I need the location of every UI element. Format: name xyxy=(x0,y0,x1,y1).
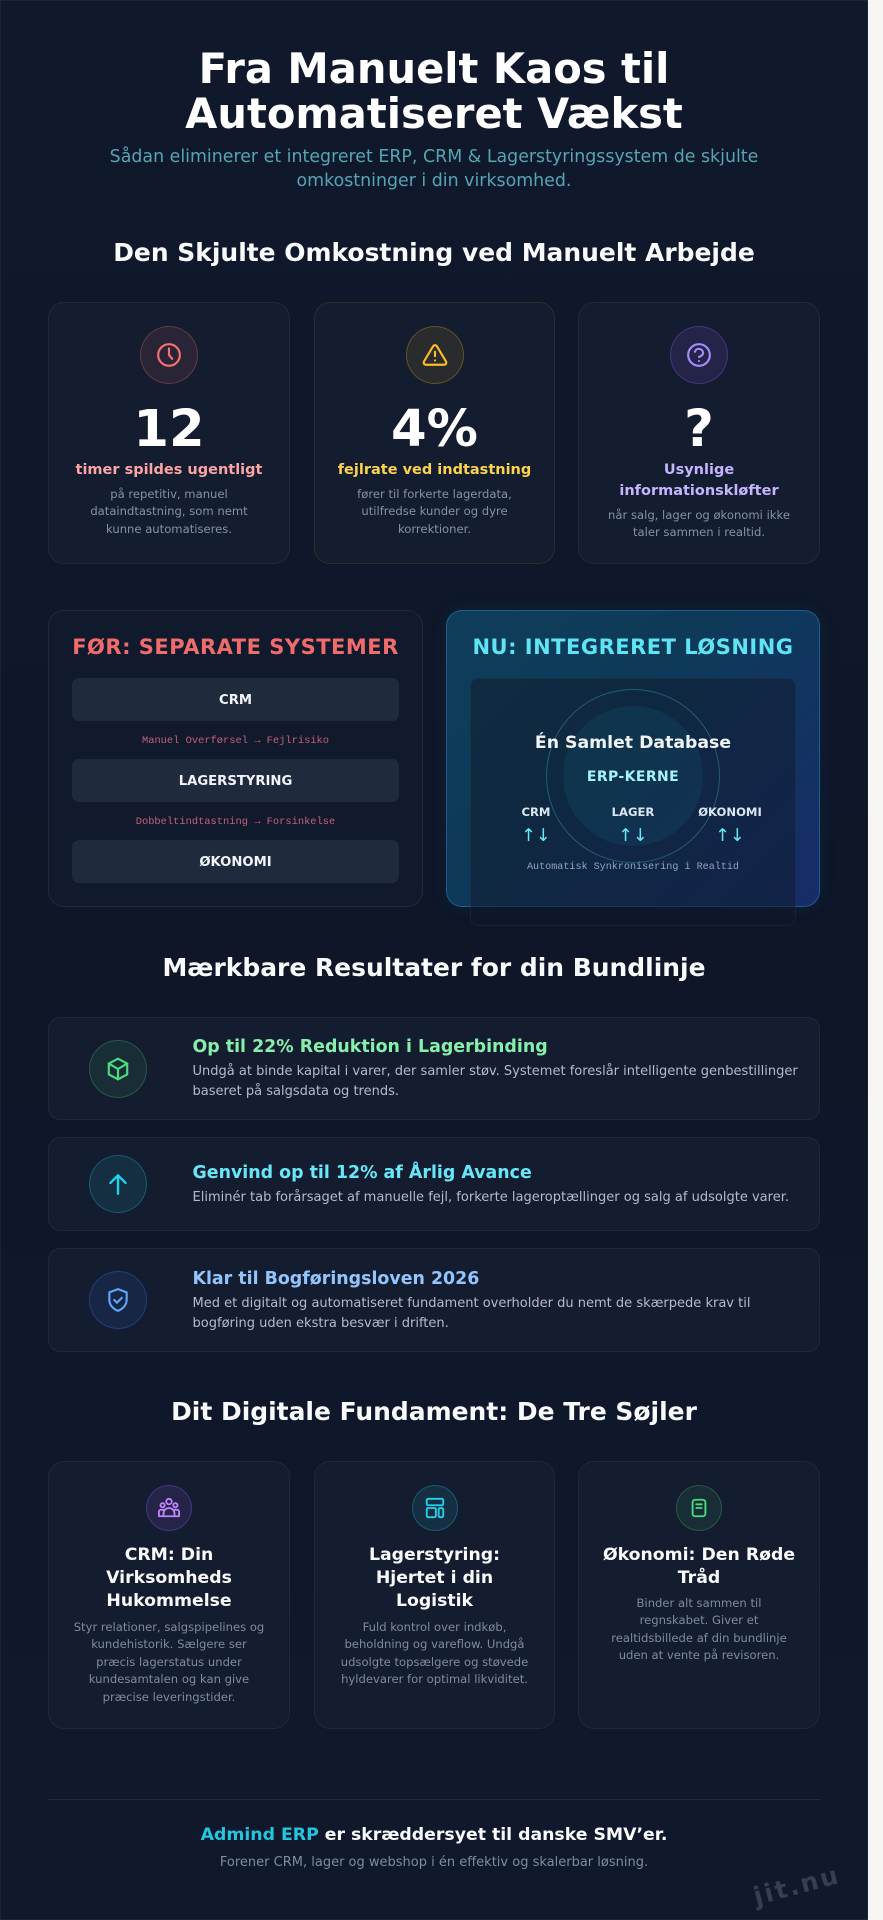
subtitle xyxy=(110,146,758,191)
connector: manual transfer: Manuel Overførsel → Fejlrisiko xyxy=(142,735,329,747)
arrows: inventory sync: ↑↓ xyxy=(618,826,648,846)
database title: Én Samlet Database xyxy=(535,733,731,753)
icon: arrow up xyxy=(89,1155,147,1213)
diagram: ERP core rings xyxy=(546,689,720,863)
footer headline: Admind ERP er skræddersyet til danske SMV’er. xyxy=(201,1825,667,1845)
stat label: informationskløfter xyxy=(619,482,779,498)
stat description: taler sammen i realtid. xyxy=(633,525,765,539)
connector: double entry: Dobbeltindtastning → Forsinkelse xyxy=(136,816,335,828)
stat number: ? xyxy=(684,399,714,459)
result description xyxy=(192,1063,798,1099)
pillar title: Tråd xyxy=(678,1568,720,1588)
icon: question mark xyxy=(670,326,728,384)
result description: bogføring uden ekstra besvær i driften. xyxy=(192,1316,449,1331)
icon: ledger xyxy=(676,1485,722,1531)
ERP core label: ERP-KERNE xyxy=(587,769,679,785)
stat label: timer spildes ugentligt xyxy=(76,462,262,478)
panel: stat card 4 percent xyxy=(314,302,555,564)
heading: pillars: Dit Digitale Fundament: De Tre Søjler xyxy=(171,1397,697,1426)
panel: unified database xyxy=(470,678,796,926)
heading: now: NU: INTEGRERET LØSNING xyxy=(472,635,794,659)
stat label xyxy=(619,462,779,498)
stat number: 4% xyxy=(391,399,478,459)
result description: baseret på salgsdata og trends. xyxy=(192,1084,399,1099)
system box: inventory xyxy=(72,759,399,802)
stat label: fejlrate ved indtastning xyxy=(338,462,531,478)
footer divider xyxy=(48,1799,820,1800)
panel: pillar inventory xyxy=(314,1461,555,1729)
pillar description: hyldevarer for optimal likviditet. xyxy=(341,1672,528,1686)
icon: shield check xyxy=(89,1271,147,1329)
panel: pillar CRM xyxy=(48,1461,290,1729)
panel: result compliance xyxy=(48,1248,820,1352)
pillar description: uden at vente på revisoren. xyxy=(619,1648,779,1662)
system box: inventory: LAGERSTYRING xyxy=(179,774,292,789)
stat description: på repetitiv, manuel xyxy=(110,487,228,501)
pillar description: beholdning og vareflow. Undgå xyxy=(344,1637,525,1651)
title xyxy=(185,44,683,138)
panel: before, separate systems xyxy=(48,610,423,907)
stat description xyxy=(90,487,248,536)
stat description: når salg, lager og økonomi ikke xyxy=(608,508,790,522)
result title: Klar til Bogføringsloven 2026 xyxy=(192,1269,479,1289)
result description: Eliminér tab forårsaget af manuelle fejl, forkerte lageroptællinger og salg af udsolgte varer. xyxy=(192,1190,789,1205)
stat label: Usynlige xyxy=(664,462,734,478)
pillar title: Lagerstyring: xyxy=(369,1545,500,1565)
icon: box xyxy=(89,1040,147,1098)
system box: CRM: CRM xyxy=(219,693,252,708)
system box: CRM xyxy=(72,678,399,721)
pillar title: Hjertet i din xyxy=(376,1568,493,1588)
heading: hidden cost: Den Skjulte Omkostning ved Manuelt Arbejde xyxy=(113,238,755,267)
result description xyxy=(192,1296,750,1331)
panel: stat card 12 hours xyxy=(48,302,290,564)
pillar title xyxy=(106,1545,232,1611)
watermark: jit.nu xyxy=(750,1860,843,1911)
pillar description: regnskabet. Giver et xyxy=(640,1613,758,1627)
stat description: korrektioner. xyxy=(398,522,471,536)
heading: results: Mærkbare Resultater for din Bundlinje xyxy=(162,953,706,982)
module label: finance: ØKONOMI xyxy=(698,805,762,819)
stat description: fører til forkerte lagerdata, xyxy=(357,487,512,501)
pillar title xyxy=(369,1545,500,1611)
icon: people xyxy=(146,1485,192,1531)
module label: CRM: CRM xyxy=(522,805,550,819)
stat description xyxy=(608,508,790,539)
pillar title: Logistik xyxy=(396,1591,473,1611)
module label: inventory: LAGER xyxy=(612,805,654,819)
pillar title xyxy=(603,1545,795,1588)
pillar description: præcise leveringstider. xyxy=(103,1690,235,1704)
heading: before: FØR: SEPARATE SYSTEMER xyxy=(72,635,399,659)
sync caption: Automatisk Synkronisering i Realtid xyxy=(527,862,739,873)
system box: finance: ØKONOMI xyxy=(199,855,272,870)
stat description: kunne automatiseres. xyxy=(106,522,232,536)
pillar description xyxy=(74,1620,264,1704)
icon: warning triangle xyxy=(406,326,464,384)
icon: clock xyxy=(140,326,198,384)
pillar description: Styr relationer, salgspipelines og xyxy=(74,1620,264,1634)
title: Fra Manuelt Kaos til xyxy=(199,44,669,93)
icon: layout xyxy=(412,1485,458,1531)
result title: Op til 22% Reduktion i Lagerbinding xyxy=(192,1037,548,1057)
result title: Genvind op til 12% af Årlig Avance xyxy=(192,1163,532,1183)
stat description: utilfredse kunder og dyre xyxy=(361,504,508,518)
footer note: Forener CRM, lager og webshop i én effektiv og skalerbar løsning. xyxy=(220,1855,648,1870)
pillar description: realtidsbillede af din bundlinje xyxy=(611,1631,787,1645)
pillar description: Binder alt sammen til xyxy=(637,1596,761,1610)
diagram: ERP core disc xyxy=(563,706,703,846)
result description: Med et digitalt og automatiseret fundament overholder du nemt de skærpede krav til xyxy=(192,1296,750,1311)
pillar title: Hukommelse xyxy=(106,1591,232,1611)
panel: pillar finance xyxy=(578,1461,820,1729)
pillar description: Fuld kontrol over indkøb, xyxy=(363,1620,506,1634)
pillar title: CRM: Din xyxy=(125,1545,213,1565)
pillar description xyxy=(341,1620,528,1686)
pillar title: Virksomheds xyxy=(106,1568,232,1588)
pillar description: kundesamtalen og kan give xyxy=(89,1672,249,1686)
subtitle: Sådan eliminerer et integreret ERP, CRM & Lagerstyringssystem de skjulte xyxy=(110,147,758,167)
pillar description: kundehistorik. Sælgere ser xyxy=(91,1637,247,1651)
panel: result inventory xyxy=(48,1017,820,1120)
title: Automatiseret Vækst xyxy=(185,89,683,138)
panel: now, integrated solution xyxy=(446,610,820,907)
arrows: finance sync: ↑↓ xyxy=(715,826,745,846)
panel: result margin xyxy=(48,1137,820,1231)
pillar description: præcis lagerstatus under xyxy=(96,1655,242,1669)
subtitle: omkostninger i din virksomhed. xyxy=(297,171,571,191)
result description: Undgå at binde kapital i varer, der samler støv. Systemet foreslår intelligente genbestillinger xyxy=(192,1064,798,1079)
pillar description: udsolgte topsælgere og støvede xyxy=(341,1655,528,1669)
arrows: CRM sync: ↑↓ xyxy=(521,826,551,846)
stat description: dataindtastning, som nemt xyxy=(90,504,248,518)
stat number: 12 xyxy=(133,399,205,459)
stat description xyxy=(357,487,512,536)
pillar title: Økonomi: Den Røde xyxy=(603,1545,795,1565)
pillar description xyxy=(611,1596,787,1662)
panel: stat card unknown xyxy=(578,302,820,564)
system box: finance xyxy=(72,840,399,883)
